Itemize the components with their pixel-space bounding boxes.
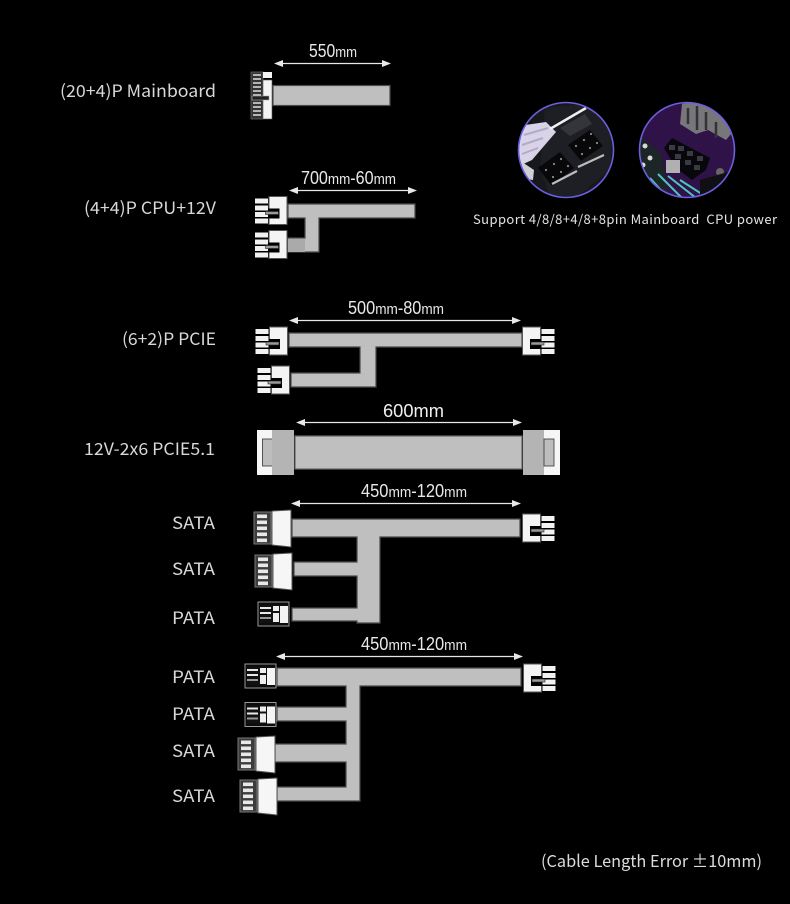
connector left	[257, 430, 294, 475]
label: PATA: PATA	[172, 604, 216, 629]
label: (20+4)P Mainboard: (20+4)P Mainboard	[60, 77, 216, 102]
label: SATA: SATA	[172, 737, 216, 762]
cable body	[292, 519, 520, 623]
connector SATA 2	[255, 553, 292, 590]
photo: motherboard connector left	[518, 102, 614, 198]
connector right	[524, 664, 556, 692]
cable: 550mm mainboard	[251, 41, 391, 119]
connector right	[522, 327, 554, 355]
label: 12V-2x6 PCIE5.1: 12V-2x6 PCIE5.1	[84, 435, 215, 460]
cable: 450mm-120mm PATA PATA SATA SATA	[238, 634, 556, 815]
connector top	[255, 196, 287, 224]
connector lower	[258, 366, 290, 394]
connector right	[522, 514, 554, 542]
dimension arrow	[296, 419, 522, 426]
dimension arrow	[276, 653, 523, 660]
connector PATA	[258, 602, 289, 626]
connector left	[256, 327, 288, 355]
dimension: 550mm: 550mm	[309, 41, 357, 61]
dimension: 450mm-120mm: 450mm-120mm	[361, 481, 467, 501]
photo ring left	[518, 102, 614, 198]
dimension arrow	[289, 317, 521, 324]
cable body	[275, 668, 521, 801]
label: SATA: SATA	[172, 555, 216, 580]
note: cable length error: (Cable Length Error ±10mm)	[541, 848, 762, 872]
dimension: 450mm-120mm: 450mm-120mm	[361, 634, 467, 654]
photo ring right	[640, 102, 734, 198]
cable body	[295, 436, 522, 469]
connector PATA 2	[245, 702, 276, 726]
dimension: 600mm: 600mm	[383, 401, 444, 421]
connector SATA 3	[238, 736, 275, 773]
cable body	[288, 204, 415, 252]
label: (4+4)P CPU+12V: (4+4)P CPU+12V	[84, 194, 216, 219]
cable body	[273, 86, 390, 106]
label: SATA: SATA	[172, 509, 216, 534]
cable: 600mm 12V-2x6	[257, 401, 560, 475]
dimension: 700mm-60mm: 700mm-60mm	[301, 168, 396, 188]
label: PATA: PATA	[172, 700, 216, 725]
label: (6+2)P PCIE: (6+2)P PCIE	[122, 325, 216, 350]
label: PATA: PATA	[172, 663, 216, 688]
connector: 24 pin	[251, 72, 272, 119]
cable: 450mm-120mm SATA SATA PATA	[254, 481, 554, 626]
dimension arrow	[291, 500, 521, 507]
photo: motherboard connector right	[639, 100, 736, 198]
connector PATA 1	[245, 664, 276, 688]
connector SATA 4	[240, 778, 277, 815]
dimension arrow	[274, 60, 391, 67]
cable: 500mm-80mm PCIE	[256, 298, 554, 394]
connector right	[523, 430, 560, 475]
dimension arrow	[289, 187, 417, 194]
cable: 700mm-60mm CPU	[255, 168, 417, 258]
connector bottom	[255, 230, 287, 258]
cable body	[289, 333, 522, 387]
connector SATA 1	[254, 510, 291, 547]
dimension: 500mm-80mm: 500mm-80mm	[348, 298, 444, 318]
label: SATA: SATA	[172, 782, 216, 807]
caption: support text: Support 4/8/8+4/8+8pin Mainboard CPU power	[473, 209, 778, 228]
